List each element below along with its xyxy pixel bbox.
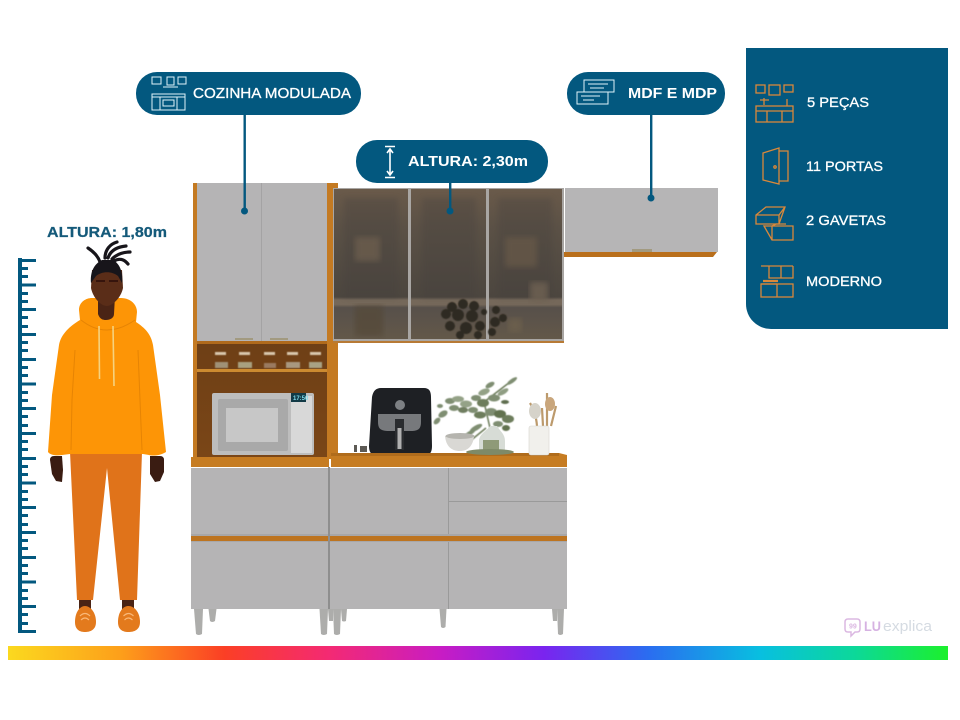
panel: specifications: 2 GAVETAS bbox=[806, 212, 886, 228]
kitchen cabinet bbox=[191, 183, 718, 635]
panel: specifications: MODERNO bbox=[806, 273, 882, 289]
microwave: 17:50 bbox=[293, 396, 309, 402]
microwave bbox=[212, 393, 314, 455]
upper grey doors bbox=[197, 183, 261, 341]
icon: modern kitchen bbox=[761, 266, 793, 297]
air fryer bbox=[369, 388, 432, 455]
tall unit side panels bbox=[193, 183, 197, 459]
callout: material bbox=[567, 72, 725, 202]
callout: altura do movel bbox=[356, 140, 548, 214]
gap between modules bbox=[328, 467, 330, 609]
panel: specifications: 11 PORTAS bbox=[806, 158, 883, 174]
rainbow bar bbox=[8, 646, 948, 660]
glass cabinet bbox=[333, 188, 564, 343]
callout: cozinha modulada: COZINHA MODULADA bbox=[193, 86, 351, 102]
logo: Lu explica bbox=[845, 618, 933, 636]
drawstrings bbox=[99, 326, 114, 386]
lower right unit bbox=[330, 468, 567, 534]
niche interior bbox=[197, 341, 327, 457]
trousers bbox=[70, 452, 142, 600]
hair bbox=[91, 260, 122, 283]
shelf bbox=[197, 369, 327, 372]
utensil pot bbox=[529, 393, 556, 455]
person figure bbox=[48, 242, 166, 632]
panel: specifications: 5 PEÇAS bbox=[807, 94, 869, 110]
ankles bbox=[79, 600, 134, 610]
icon: door bbox=[763, 148, 788, 184]
callout: material: MDF E MDP bbox=[628, 85, 717, 102]
hands bbox=[50, 456, 63, 482]
icon: drawers bbox=[756, 207, 793, 240]
worktop right bbox=[331, 453, 567, 467]
logo: Lu explica: explica bbox=[883, 618, 933, 635]
ruler scale bbox=[18, 258, 36, 633]
reflected plant bbox=[441, 299, 507, 339]
callout: cozinha modulada bbox=[136, 72, 361, 214]
neck and face bbox=[98, 296, 115, 320]
jars bbox=[215, 352, 322, 368]
logo: Lu explica: LU bbox=[864, 618, 881, 634]
plant bbox=[432, 376, 518, 446]
icon: boards bbox=[577, 80, 614, 104]
worktop left bbox=[191, 457, 329, 467]
logo: Lu explica: 99 bbox=[849, 624, 857, 630]
icon: kitchen bbox=[152, 77, 186, 110]
callout: altura do movel: ALTURA: 2,30m bbox=[408, 153, 528, 170]
legs bbox=[194, 609, 564, 635]
upper right cabinet bbox=[565, 188, 718, 252]
icon: height arrow bbox=[385, 146, 395, 178]
hoodie bbox=[48, 298, 166, 456]
small objects bbox=[354, 426, 514, 455]
icon: pieces bbox=[756, 85, 793, 122]
lower left unit bbox=[191, 468, 328, 534]
panel: specifications bbox=[746, 48, 948, 329]
shoes bbox=[75, 606, 96, 632]
label: person height: ALTURA: 1,80m bbox=[47, 224, 167, 241]
